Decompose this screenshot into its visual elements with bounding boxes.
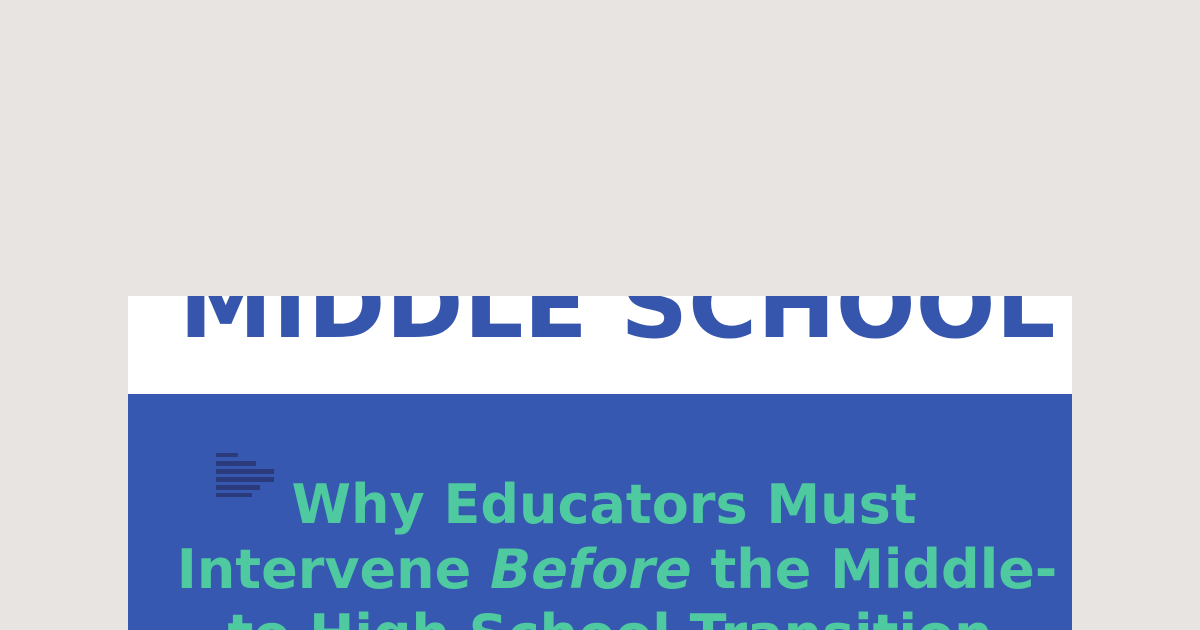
- icon: list lines: [216, 453, 274, 497]
- panel: blue: [128, 394, 1072, 630]
- header band: [128, 296, 1072, 394]
- card: [128, 296, 1072, 630]
- subtitle: Why Educators Must: [291, 473, 917, 536]
- subtitle: [177, 473, 1057, 630]
- subtitle: Intervene Before the Middle-: [177, 538, 1057, 601]
